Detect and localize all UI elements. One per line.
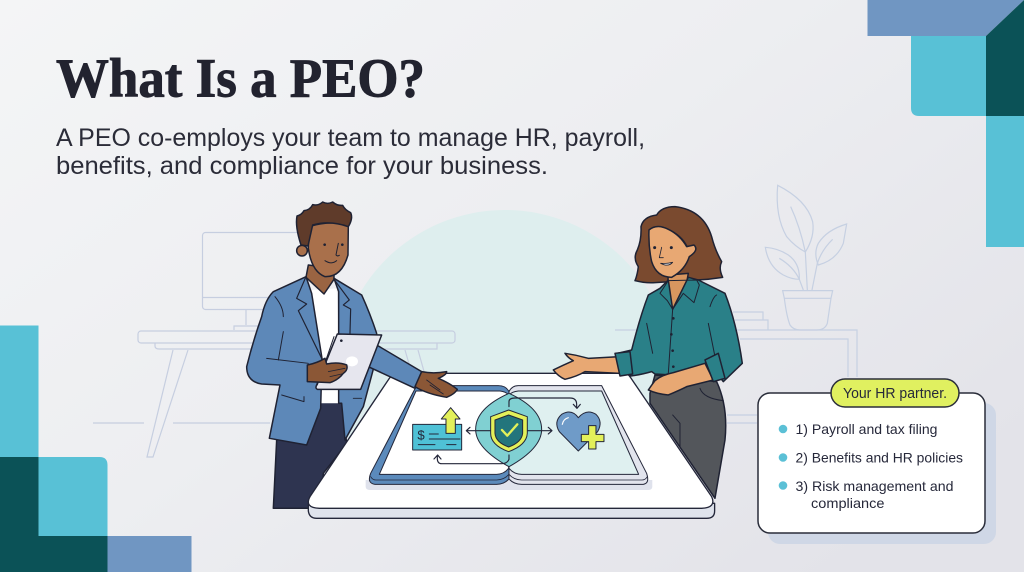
list item 3: [779, 478, 954, 511]
corner blocks top right: [868, 0, 1024, 247]
list item 3: compliance: [811, 495, 885, 511]
background desk and plant (right): [615, 185, 857, 423]
book left page: [369, 386, 509, 484]
callout card: Your HR partner.: [843, 386, 947, 402]
card body: [758, 393, 985, 533]
yellow up arrow: [441, 408, 460, 433]
man arm, tablet and hands: [307, 334, 457, 397]
lens: [476, 393, 542, 467]
list item 1: 1) Payroll and tax filing: [796, 421, 938, 437]
list item 2: 2) Benefits and HR policies: [796, 450, 963, 466]
table with open book and icons: $: [417, 428, 425, 443]
list item 3: 3) Risk management and: [796, 478, 954, 494]
subtitle: [56, 124, 645, 180]
subtitle: benefits, and compliance for your business.: [56, 152, 548, 180]
mint circle behind figures: [348, 210, 654, 438]
table with open book and icons: [308, 373, 715, 518]
woman forearms and hands: [553, 352, 725, 395]
man figure (body): [247, 202, 377, 508]
subtitle: A PEO co-employs your team to manage HR, payroll,: [56, 124, 645, 152]
heart: [557, 412, 600, 451]
woman figure (body): [617, 207, 742, 498]
book right page: [509, 386, 648, 484]
plus: [581, 426, 604, 449]
background desk and monitor (left): [93, 232, 455, 457]
corner blocks bottom left: [0, 326, 192, 572]
card shadow: [768, 403, 996, 544]
book shadow: [366, 480, 652, 490]
table edge: [308, 503, 715, 518]
shield: [491, 410, 527, 452]
table top: [308, 373, 713, 508]
pill label: [831, 379, 959, 407]
title: What Is a PEO?: [56, 48, 425, 108]
arrows: [434, 398, 580, 464]
callout card: [758, 379, 996, 544]
check card: [413, 424, 462, 450]
